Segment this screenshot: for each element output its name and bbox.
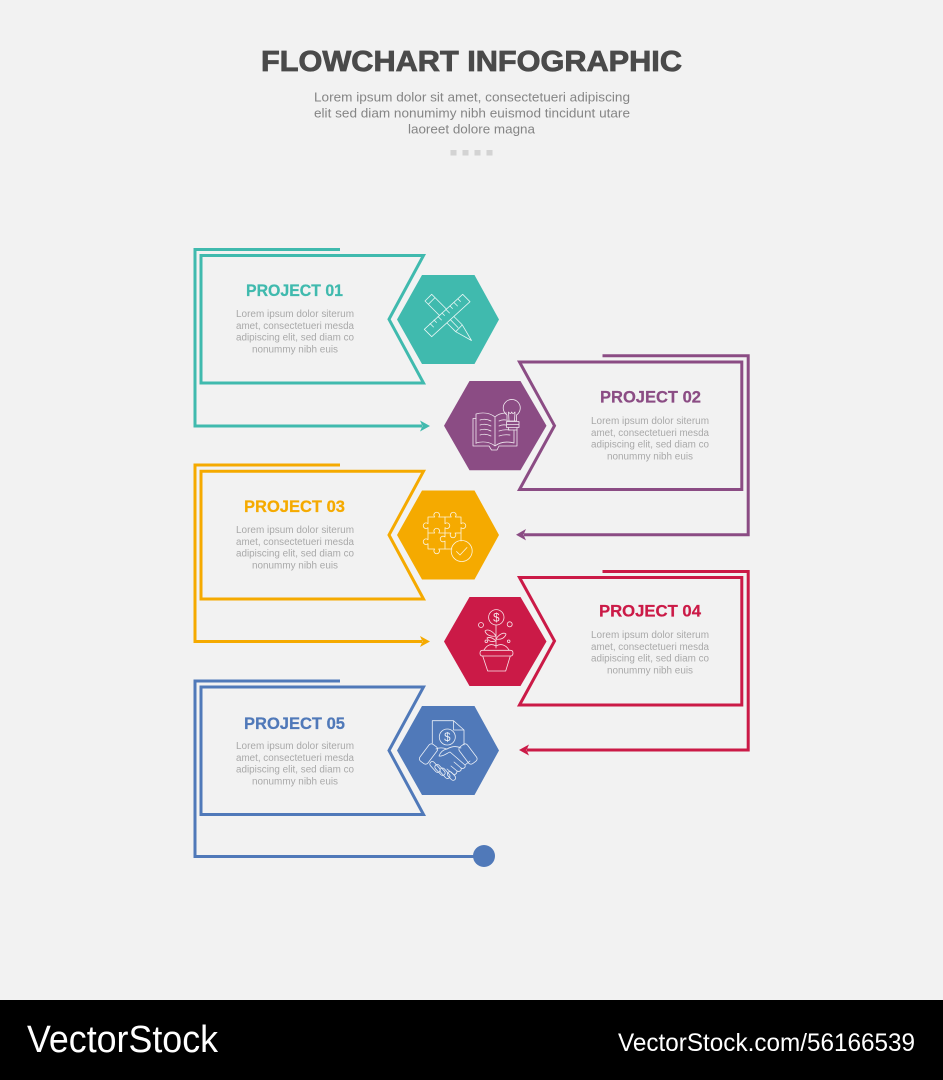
body text 03 bbox=[236, 525, 354, 571]
subtitle text: elit sed diam nonumimy nibh euismod tincidunt utare bbox=[314, 106, 630, 120]
body text 02: Lorem ipsum dolor siterum bbox=[591, 416, 709, 427]
box 05 bbox=[201, 687, 424, 814]
panel: project 05 bbox=[195, 681, 499, 867]
hexagon 05 bbox=[397, 706, 499, 795]
watermark bar bbox=[0, 1000, 943, 1080]
body text 03: nonummy nibh euis bbox=[252, 560, 338, 571]
body text 01: amet, consectetueri mesda bbox=[236, 321, 354, 332]
body text 04: amet, consectetueri mesda bbox=[591, 642, 709, 653]
connector line with end dot bbox=[195, 681, 495, 867]
heading 02: PROJECT 02 bbox=[600, 388, 701, 406]
heading 03: PROJECT 03 bbox=[244, 497, 345, 516]
title divider dots bbox=[450, 150, 492, 156]
body text 01: nonummy nibh euis bbox=[252, 344, 338, 355]
body text 04 bbox=[591, 630, 709, 676]
connector arrow 02 bbox=[516, 356, 748, 540]
box 03 bbox=[201, 471, 424, 599]
body text 03: amet, consectetueri mesda bbox=[236, 537, 354, 548]
body text 01: adipiscing elit, sed diam co bbox=[236, 333, 354, 344]
connector arrow 03 bbox=[195, 465, 430, 647]
icon: puzzle and check mark bbox=[423, 512, 472, 562]
subtitle text: Lorem ipsum dolor sit amet, consectetueri adipiscing bbox=[314, 90, 630, 104]
body text 02 bbox=[591, 416, 709, 462]
hexagon 03 bbox=[397, 490, 499, 580]
connector arrow 04 bbox=[519, 572, 748, 756]
subtitle text bbox=[314, 90, 630, 136]
body text 03: Lorem ipsum dolor siterum bbox=[236, 525, 354, 536]
body text 05: adipiscing elit, sed diam co bbox=[236, 765, 354, 776]
panel: project 03 bbox=[195, 465, 499, 647]
icon: handshake and invoice: $ bbox=[444, 732, 451, 744]
box 04 bbox=[520, 578, 742, 705]
body text 05: amet, consectetueri mesda bbox=[236, 753, 354, 764]
box 01 bbox=[201, 256, 424, 383]
body text 04: nonummy nibh euis bbox=[607, 665, 693, 676]
watermark url: VectorStock.com/56166539 bbox=[618, 1029, 915, 1057]
watermark logo text: VectorStock bbox=[27, 1019, 219, 1061]
body text 04: Lorem ipsum dolor siterum bbox=[591, 630, 709, 641]
hexagon 02 bbox=[444, 381, 546, 470]
body text 01 bbox=[236, 309, 354, 355]
hexagon 01 bbox=[397, 275, 499, 364]
body text 05: Lorem ipsum dolor siterum bbox=[236, 741, 354, 752]
body text 02: nonummy nibh euis bbox=[607, 451, 693, 462]
panel: project 02 bbox=[444, 356, 748, 540]
connector arrow 01 bbox=[195, 250, 430, 432]
body text 04: adipiscing elit, sed diam co bbox=[591, 654, 709, 665]
body text 01: Lorem ipsum dolor siterum bbox=[236, 309, 354, 320]
heading 01: PROJECT 01 bbox=[246, 281, 343, 300]
icon: handshake and invoice bbox=[418, 721, 478, 781]
body text 02: adipiscing elit, sed diam co bbox=[591, 440, 709, 451]
body text 02: amet, consectetueri mesda bbox=[591, 428, 709, 439]
title: FLOWCHART INFOGRAPHIC bbox=[261, 46, 682, 78]
box 02 bbox=[520, 362, 742, 490]
hexagon 04 bbox=[444, 597, 546, 686]
heading 04: PROJECT 04 bbox=[599, 602, 702, 620]
body text 05 bbox=[236, 741, 354, 787]
heading 05: PROJECT 05 bbox=[244, 714, 345, 733]
body text 03: adipiscing elit, sed diam co bbox=[236, 549, 354, 560]
panel: project 04 bbox=[444, 572, 748, 756]
subtitle text: laoreet dolore magna bbox=[408, 122, 536, 136]
panel: project 01 bbox=[195, 250, 499, 432]
icon: money plant in pot: $ bbox=[493, 612, 500, 624]
icon: ruler and pencil bbox=[424, 294, 472, 340]
icon: book and light bulb bbox=[473, 399, 520, 450]
icon: money plant in pot bbox=[478, 610, 513, 671]
body text 05: nonummy nibh euis bbox=[252, 776, 338, 787]
